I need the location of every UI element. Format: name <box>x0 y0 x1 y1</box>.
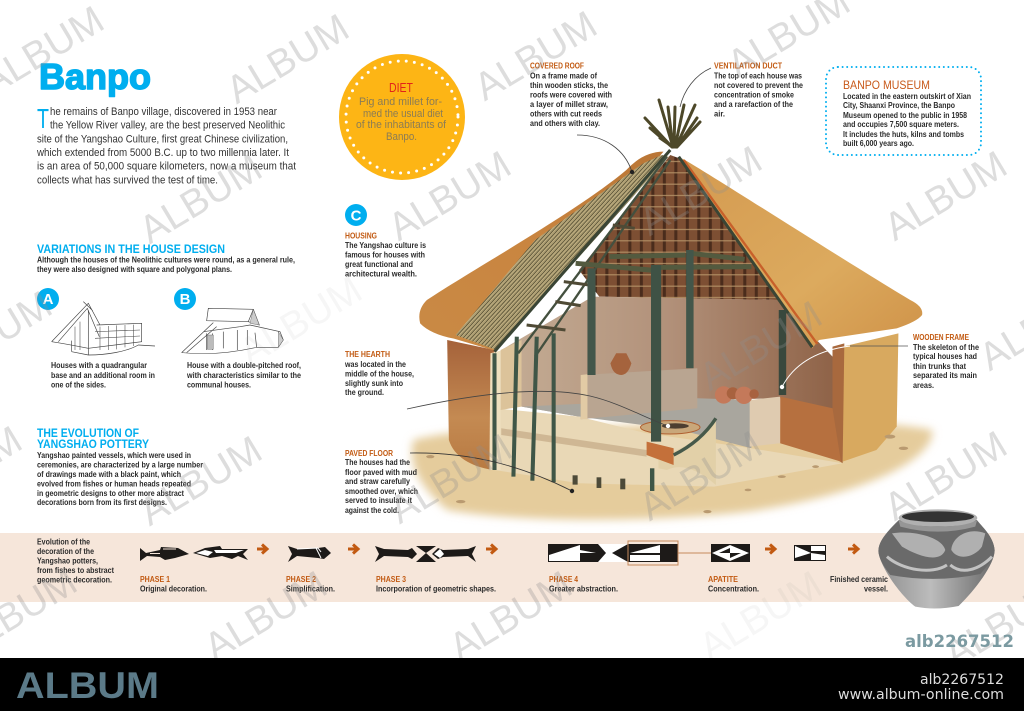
watermarks: ALBUM <box>692 563 829 669</box>
label: paved floor: smoothed over, which <box>345 487 418 496</box>
leader: the hearth <box>407 391 670 428</box>
footer bar: alb2267512 <box>920 672 1004 688</box>
band intro text: from fishes to abstract <box>37 566 114 575</box>
watermarks: ALBUM <box>132 428 269 534</box>
watermarks: ALBUM <box>197 563 334 669</box>
label: covered roof: a layer of millet straw, <box>530 100 608 109</box>
section: evolution of Yangshao pottery: of drawings made with a black paint, which <box>37 470 181 479</box>
intro text block: collects what has survived the test of time. <box>37 174 218 186</box>
front floor <box>494 408 843 487</box>
intro text block: is an area of 50,000 square kilometers, now a museum that <box>37 161 296 173</box>
jars <box>610 353 759 404</box>
diet circle: med the usual diet <box>363 108 443 120</box>
label: paved floor: The houses had the <box>345 458 410 467</box>
label: covered roof: COVERED ROOF <box>530 62 584 71</box>
diet circle <box>339 54 465 180</box>
band phase labels: Greater abstraction. <box>549 585 618 594</box>
section: evolution of Yangshao pottery: Yangshao painted vessels, which were used in <box>37 451 191 460</box>
band phase labels: Original decoration. <box>140 585 207 594</box>
fish decoration: phase 1 <box>140 546 248 561</box>
geometric band: phase 4 <box>548 541 711 565</box>
front curved wall <box>647 418 716 485</box>
housing label: famous for houses with <box>345 251 425 260</box>
watermarks: ALBUM <box>381 143 518 249</box>
watermarks: ALBUM <box>382 426 519 532</box>
hearth <box>641 421 700 434</box>
intro text block: the Yellow River valley, are the best preserved Neolithic <box>50 120 285 132</box>
back wall <box>501 297 832 417</box>
band intro text: geometric decoration. <box>37 575 112 584</box>
caption A: Houses with a quadrangular <box>51 361 147 370</box>
badge C: C <box>351 208 362 224</box>
caption A: one of the sides. <box>51 380 106 390</box>
intro text block: T <box>37 103 49 134</box>
label: ventilation duct: not covered to prevent the <box>714 81 803 90</box>
band phase labels: Simplification. <box>286 585 335 594</box>
post stubs <box>573 468 654 491</box>
diet circle: DIET <box>389 80 413 95</box>
band intro text: decoration of the <box>37 547 94 556</box>
watermarks: ALBUM <box>877 143 1014 249</box>
label: covered roof <box>530 62 612 128</box>
footer bar <box>0 658 1024 711</box>
straw layer <box>456 155 669 350</box>
leader: wooden frame <box>780 346 908 389</box>
straw ventilation finial <box>645 100 700 147</box>
intro text block <box>36 103 296 186</box>
label: covered roof: roofs were covered with <box>530 90 612 99</box>
watermarks: ALBUM <box>442 563 579 669</box>
label: paved floor: against the cold. <box>345 506 399 515</box>
label: ventilation duct: The top of each house was <box>714 72 802 81</box>
label: paved floor: PAVED FLOOR <box>345 449 393 458</box>
house illustration <box>412 150 932 520</box>
band intro text <box>37 537 114 584</box>
panel: Banpo Museum: and occupies 7,500 square meters. <box>843 120 959 129</box>
floor shadow <box>501 428 647 457</box>
clay front piece <box>647 442 674 465</box>
bench wall edge <box>581 374 587 419</box>
lattice roof interior <box>579 155 778 300</box>
label: wooden frame: separated its main <box>913 371 977 380</box>
label: ventilation duct: concentration of smoke <box>714 90 794 99</box>
image reference code: alb2267512 <box>905 632 1014 652</box>
curved wall rim <box>674 418 716 455</box>
label: ventilation duct: air. <box>714 110 725 119</box>
band phase labels: APATITE <box>708 575 739 584</box>
panel: Banpo Museum <box>826 67 981 155</box>
low interior wall <box>780 397 841 462</box>
caption A <box>51 361 155 390</box>
rafters and posts <box>494 150 817 482</box>
label: the hearth: slightly sunk into <box>345 379 403 388</box>
band phase labels <box>140 575 888 594</box>
geometric band: concentration <box>711 544 750 562</box>
label: wooden frame: WOODEN FRAME <box>913 333 970 342</box>
panel: Banpo Museum: Museum opened to the public in 1958 <box>843 111 967 120</box>
band phase labels: PHASE 4 <box>549 575 578 584</box>
label: covered roof: and others with clay. <box>530 119 600 128</box>
section: evolution of Yangshao pottery <box>37 426 203 507</box>
left wall cut face <box>489 351 501 470</box>
fish decoration: phase 2 <box>288 546 331 562</box>
label: wooden frame: thin trunks that <box>913 362 966 371</box>
section: evolution of Yangshao pottery: in geometric designs to other more abstract <box>37 489 184 498</box>
arrow <box>486 544 496 554</box>
housing label <box>345 232 426 279</box>
diet circle: of the inhabitants of <box>356 119 447 131</box>
bench wall <box>581 368 697 419</box>
right roof <box>682 158 922 348</box>
band phase labels: PHASE 3 <box>376 575 406 584</box>
band phase labels: Incorporation of geometric shapes. <box>376 585 496 594</box>
intro text block: he remains of Banpo village, discovered in 1953 near <box>50 106 277 118</box>
label: covered roof: others with cut reeds <box>530 110 602 119</box>
label: the hearth: THE HEARTH <box>345 350 390 359</box>
intro text block: which extended from 5000 B.C. up to two millennia later. It <box>36 147 289 159</box>
caption B: House with a double-pitched roof, <box>187 361 301 370</box>
arrow <box>257 544 267 554</box>
housing label: architectural wealth. <box>345 270 417 279</box>
badge A <box>37 288 59 310</box>
label: paved floor <box>345 449 418 515</box>
intro text block: site of the Yangshao Culture, first great Chinese civilization, <box>37 133 288 145</box>
pottery evolution band <box>0 533 1024 602</box>
finished ceramic vessel <box>878 509 995 609</box>
label: ventilation duct: and a rarefaction of the <box>714 100 793 109</box>
watermarks: ALBUM <box>632 423 769 529</box>
watermarks: ALBUM <box>877 423 1014 529</box>
label: the hearth: middle of the house, <box>345 370 414 379</box>
label: covered roof: thin wooden sticks, the <box>530 81 608 90</box>
caption B: communal houses. <box>187 380 251 390</box>
label: ventilation duct <box>714 62 803 119</box>
section: evolution of Yangshao pottery: ceremonies, are characterized by a large number <box>37 461 203 470</box>
diet circle: Banpo. <box>386 131 417 143</box>
ground pebbles <box>426 435 908 513</box>
label: wooden frame: typical houses had <box>913 352 977 361</box>
watermarks: ALBUM <box>467 3 604 109</box>
left inner wall <box>501 340 522 410</box>
badge B: B <box>180 291 191 308</box>
band phase labels: Finished ceramic <box>830 575 888 584</box>
section: evolution of Yangshao pottery: evolved from fishes or human heads repeated <box>37 480 191 488</box>
panel: Banpo Museum: built 6,000 years ago. <box>843 139 914 148</box>
central post <box>641 265 671 442</box>
left roof <box>419 152 664 351</box>
arrow <box>348 544 358 554</box>
band phase labels: Concentration. <box>708 585 759 594</box>
sand ground <box>412 421 932 520</box>
band phase labels: vessel. <box>864 585 888 594</box>
label: the hearth: the ground. <box>345 388 384 397</box>
section: evolution of Yangshao pottery: decorations born from its first designs. <box>37 498 167 507</box>
panel: Banpo Museum: BANPO MUSEUM <box>843 78 930 92</box>
caption B: with characteristics similar to the <box>186 371 301 380</box>
band intro text: Evolution of the <box>37 537 90 546</box>
title: Banpo <box>39 56 151 97</box>
interior floor <box>522 398 751 448</box>
label: wooden frame: The skeleton of the <box>913 343 979 352</box>
label: paved floor: served to insulate it <box>345 496 412 505</box>
band phase labels: PHASE 1 <box>140 575 170 584</box>
panel: Banpo Museum: It includes the huts, kilns and tombs <box>843 130 964 139</box>
section: variations in the house design: VARIATIONS IN THE HOUSE DESIGN <box>37 242 225 256</box>
section: variations in the house design <box>37 242 295 274</box>
watermarks: ALBUM <box>632 138 769 244</box>
watermarks: ALBUM <box>232 268 369 374</box>
caption B <box>186 361 301 390</box>
section: variations in the house design: Although the houses of the Neolithic cultures were round, as a general rule, <box>37 256 295 265</box>
housing label: great functional and <box>345 260 413 269</box>
label: paved floor: and straw carefully <box>345 477 410 486</box>
geometric band: final motif <box>794 545 826 561</box>
right wall <box>843 333 898 462</box>
watermarks: ALBUM <box>219 6 356 112</box>
leader: paved floor <box>410 453 574 493</box>
band phase labels: PHASE 2 <box>286 575 316 584</box>
badge B <box>174 288 196 310</box>
leader: ventilation duct <box>680 68 711 107</box>
section: evolution of Yangshao pottery: THE EVOLUTION OF <box>37 426 139 440</box>
fish decoration: phase 3 <box>375 546 476 562</box>
housing label: HOUSING <box>345 232 377 240</box>
right wall cut face <box>832 343 844 463</box>
left wall <box>447 340 494 470</box>
label: ventilation duct: VENTILATION DUCT <box>714 62 782 71</box>
label: covered roof: On a frame made of <box>530 72 597 81</box>
arrow <box>848 544 858 554</box>
watermarks: ALBUM <box>692 293 829 399</box>
label: wooden frame: areas. <box>913 381 934 390</box>
label: the hearth <box>344 350 414 397</box>
section: evolution of Yangshao pottery: YANGSHAO POTTERY <box>37 437 149 451</box>
footer bar: ALBUM <box>16 665 159 706</box>
caption A: base and an additional room in <box>51 371 155 380</box>
cream wall <box>750 397 780 447</box>
section: variations in the house design: they were also designed with square and polygonal plans. <box>37 265 232 274</box>
arrow <box>765 544 775 554</box>
label: wooden frame <box>913 333 979 390</box>
leader: covered roof <box>577 135 634 174</box>
panel: Banpo Museum: Located in the eastern outskirt of Xian <box>843 92 971 101</box>
diet circle: Pig and millet for- <box>359 96 442 108</box>
panel: Banpo Museum: City, Shaanxi Province, the Banpo <box>843 101 955 110</box>
label: the hearth: was located in the <box>344 360 406 369</box>
band intro text: Yangshao potters, <box>37 556 98 565</box>
badge C <box>345 204 367 226</box>
sketch: quadrangular house <box>52 302 155 355</box>
footer bar: www.album-online.com <box>838 687 1004 703</box>
label: paved floor: floor paved with mud <box>345 468 417 477</box>
housing label: The Yangshao culture is <box>345 241 426 250</box>
sketch: double-pitched house <box>182 308 283 354</box>
watermarks: ALBUM <box>132 146 269 252</box>
badge A: A <box>43 291 54 308</box>
